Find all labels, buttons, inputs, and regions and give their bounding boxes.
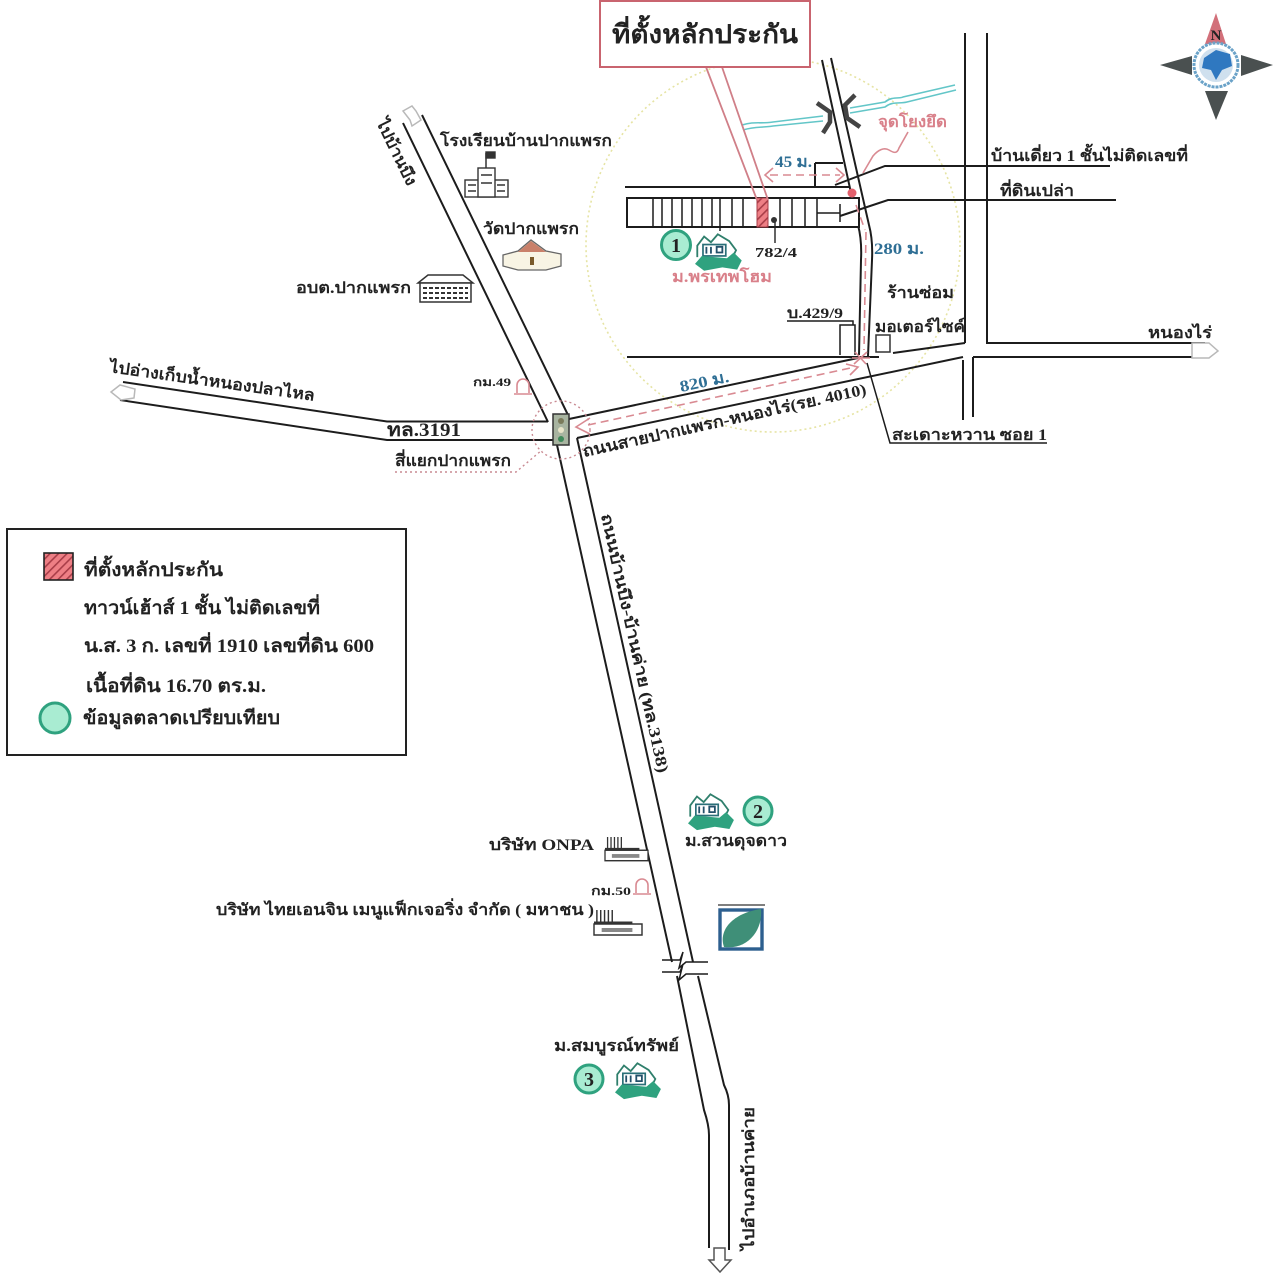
arrow: to Nong Rai (1192, 343, 1218, 358)
small building 429/9 (787, 321, 855, 355)
label: to Ban Khai district: ไปอำเภอบ้านค่าย (739, 1107, 758, 1252)
label: km 49: กม.49 (473, 377, 511, 389)
label: school: โรงเรียนบ้านปากแพรก (439, 130, 612, 150)
marker 1: 1 (671, 235, 681, 257)
marker 2: 2 (753, 801, 763, 823)
arrow: to Ban Bueng (403, 106, 421, 126)
icon: temple (503, 240, 561, 270)
label: motorcycle: มอเตอร์ไซค์ (875, 317, 965, 336)
road: Pak Phaeng - Nong Rai (569, 343, 965, 438)
label: single house: บ้านเดี่ยว 1 ชั้นไม่ติดเลขที่ (991, 143, 1188, 165)
leader line: vacant land (840, 200, 1116, 216)
label: Nong Rai: หนองไร่ (1148, 323, 1212, 342)
soi lines (625, 187, 879, 357)
label: to reservoir: ไปอ่างเก็บน้ำหนองปลาไหล (106, 354, 316, 405)
label: house 429/9: บ.429/9 (787, 306, 843, 322)
icon: traffic light (553, 414, 569, 445)
label: road Ban Bueng - Ban Khai: ถนนบ้านบึง-บ้านค่าย (ทล.3138) (597, 512, 672, 775)
label: 45 m: 45 ม. (775, 154, 812, 171)
icon: bridge (817, 95, 860, 133)
compass N letter: N (1211, 28, 1222, 44)
river (742, 85, 956, 130)
compass south (1205, 91, 1228, 120)
subject plot (757, 198, 768, 227)
label: SAO office: อบต.ปากแพรก (296, 280, 411, 297)
callout pointer (706, 67, 768, 200)
leader line: single house (835, 166, 1110, 185)
neighbouring single house (815, 163, 843, 186)
arrow: to reservoir (111, 385, 135, 400)
leader line: Sa Dao Wan Soi 1 (867, 363, 1047, 443)
label: vacant land: ที่ดินเปล่า (1000, 179, 1074, 200)
road: north-south soi to the property (822, 58, 872, 356)
road break marker (662, 952, 708, 980)
label: to Ban Bueng: ไปบ้านบึง (371, 113, 421, 188)
legend text: townhouse: ทาวน์เฮ้าส์ 1 ชั้น ไม่ติดเลขที่ (84, 593, 320, 619)
marker 2 (688, 794, 772, 830)
house number pointer (774, 219, 776, 243)
label: Sa Dao Wan Soi 1: สะเดาะหวาน ซอย 1 (892, 427, 1047, 444)
label: Somboon Sap: ม.สมบูรณ์ทรัพย์ (554, 1036, 679, 1057)
icon: compass (1160, 13, 1273, 120)
road: eastern vertical roads (963, 33, 1205, 420)
label: highway 3191: ทล.3191 (387, 420, 461, 441)
label: ONPA: บริษัท ONPA (489, 836, 595, 854)
panel: legend (7, 529, 406, 755)
road: highway 3191 west (111, 382, 555, 440)
arrow: to Ban Khai district (709, 1248, 731, 1272)
icon: ONPA factory (605, 837, 648, 861)
label: km 50: กม.50 (591, 884, 631, 898)
label: 280 m: 280 ม. (874, 241, 924, 258)
row houses (627, 198, 859, 243)
icon: km 50 marker (633, 879, 651, 894)
icon: housing estate 1 (695, 234, 742, 271)
icon: km 49 marker (514, 379, 532, 394)
legend swatch: collateral (44, 553, 73, 580)
callout: collateral location (600, 1, 810, 67)
road: north to Ban Bueng (403, 106, 568, 422)
road: south highway 3138 (557, 438, 731, 1272)
label: road name Pak Phaeng - Nong Rai: ถนนสายปากแพรก-หนองไร่(รย. 4010) (581, 380, 868, 461)
proximity circle (586, 58, 960, 432)
legend text: land area: เนื้อที่ดิน 16.70 ตร.ม. (86, 671, 266, 697)
marker 3: 3 (584, 1069, 594, 1091)
wavy line to meeting point (863, 132, 908, 173)
marker 3 (575, 1063, 661, 1099)
label: Phon Thep Home: ม.พรเทพโฮม (672, 266, 772, 286)
label: house number: 782/4 (755, 246, 797, 261)
legend swatch: market data (40, 703, 70, 733)
compass west (1160, 56, 1192, 75)
label: meeting point: จุดโยงยึด (878, 111, 947, 132)
junction callout dotted (395, 401, 590, 472)
icon: Bangchak gas station logo (718, 905, 765, 949)
compass east (1241, 55, 1273, 76)
legend text: market comparison: ข้อมูลตลาดเปรียบเทียบ (83, 707, 280, 730)
compass globe (1194, 43, 1238, 87)
route arrows (576, 168, 870, 434)
label: temple: วัดปากแพรก (483, 220, 579, 238)
icon: SAO office (418, 275, 473, 302)
label: repair shop: ร้านซ่อม (887, 284, 954, 302)
label: Suan Kut Dao: ม.สวนดุจดาว (685, 833, 787, 851)
compass north (1205, 13, 1226, 44)
small building motorcycle shop (876, 335, 890, 352)
callout: collateral location: ที่ตั้งหลักประกัน (612, 14, 798, 49)
legend text: collateral location: ที่ตั้งหลักประกัน (84, 555, 223, 581)
pink pin (848, 188, 856, 198)
icon: Thai Engine factory (594, 910, 642, 935)
label: 820 m: 820 ม. (678, 369, 731, 396)
icon: school (465, 152, 508, 197)
label: Thai Engine Manufacturing: บริษัท ไทยเอนจิน เมนูแฟ็กเจอริ่ง จำกัด ( มหาชน ) (216, 898, 594, 921)
legend text: title deed: น.ส. 3 ก. เลขที่ 1910 เลขที่ดิน 600 (84, 632, 374, 657)
marker 1 (662, 230, 742, 271)
label: Pak Phaeng junction: สี่แยกปากแพรก (395, 449, 511, 470)
